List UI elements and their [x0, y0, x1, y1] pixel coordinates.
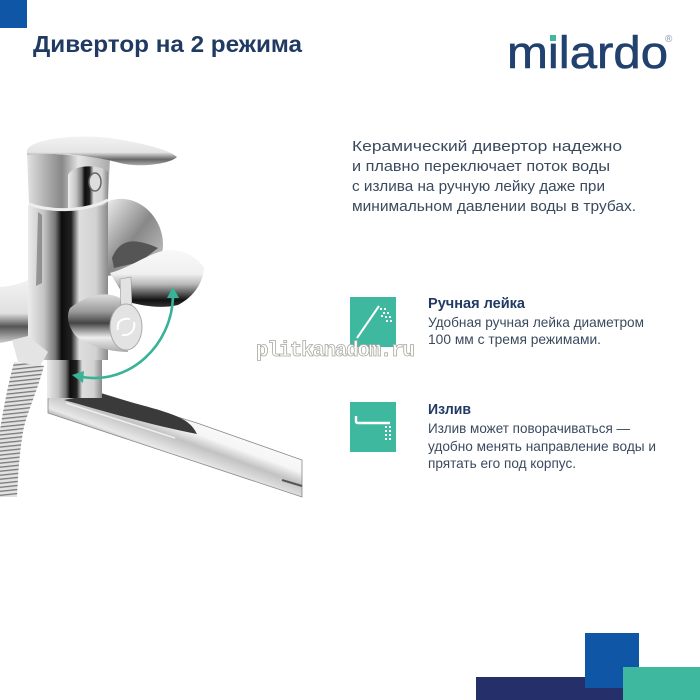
cap — [27, 152, 110, 210]
logo: milardo: milardo — [507, 27, 668, 78]
text block: hand shower: Удобная ручная лейка диаметром — [428, 314, 644, 330]
icon: spout — [350, 402, 396, 452]
diverter tab — [120, 277, 132, 312]
logo: milardo: ® — [665, 34, 673, 45]
diverter dial — [110, 304, 142, 350]
text block: description: с излива на ручную лейку даже при — [352, 178, 605, 195]
icon: hand shower — [350, 297, 396, 347]
wall disc — [106, 199, 163, 276]
lower body — [47, 356, 102, 398]
text block: spout: прятать его под корпус. — [428, 455, 576, 471]
text block: spout — [428, 401, 656, 471]
hose — [0, 362, 44, 497]
text block: description — [352, 138, 636, 215]
text block: description: и плавно переключает поток воды — [352, 158, 610, 175]
text block: hand shower: 100 мм с тремя режимами. — [428, 331, 601, 347]
text block: hand shower: Ручная лейка — [428, 295, 526, 312]
decoration: bottom right blocks — [476, 633, 700, 700]
hose connector — [12, 336, 48, 366]
lever — [27, 136, 177, 165]
text block: spout: Излив — [428, 401, 471, 418]
text block: description: Керамический дивертор надежно — [352, 138, 622, 155]
watermark: plitkanadom.ru — [256, 340, 415, 363]
diverter paddle — [110, 250, 204, 307]
text block: hand shower — [428, 295, 644, 347]
illustration: chrome bath faucet — [0, 136, 302, 497]
main body — [28, 205, 108, 360]
diverter barrel — [68, 294, 128, 352]
text block: spout: удобно менять направление воды и — [428, 438, 656, 454]
text block: spout: Излив может поворачиваться — — [428, 420, 630, 436]
arrow: rotation direction — [72, 287, 179, 383]
corner square: top left — [0, 0, 27, 28]
spout — [48, 392, 302, 497]
text block: description: минимальном давлении воды в трубах. — [352, 198, 636, 215]
title: Дивертор на 2 режима — [33, 31, 302, 57]
left arm — [0, 277, 62, 343]
